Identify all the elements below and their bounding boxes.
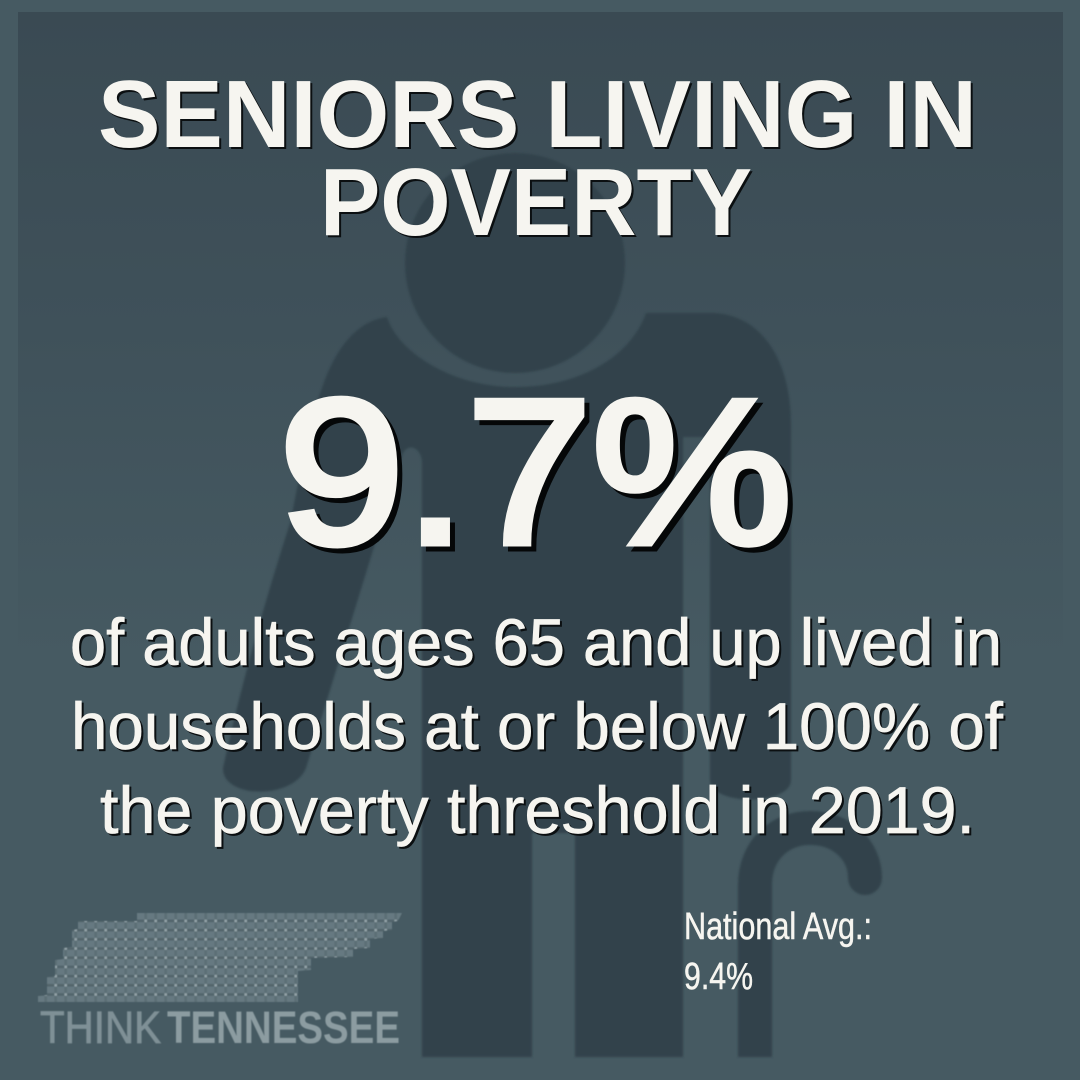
title line 1: SENIORS LIVING IN	[98, 61, 977, 168]
description line 3: the poverty threshold in 2019.	[100, 773, 975, 847]
national average value: 9.4%	[684, 956, 753, 998]
title	[98, 61, 977, 256]
figure head	[405, 153, 625, 373]
figure body and legs	[223, 313, 791, 1057]
description line 1: of adults ages 65 and up lived in	[70, 605, 1002, 679]
national average note	[684, 906, 872, 998]
icon: senior figure with cane	[223, 153, 882, 1057]
national average label: National Avg.:	[684, 906, 872, 948]
description line 2: households at or below 100% of	[71, 689, 1004, 763]
title line 2: POVERTY	[320, 149, 752, 256]
figure cane	[755, 828, 865, 1057]
logo: Think Tennessee	[38, 913, 402, 1053]
logo: Tennessee state dot map	[38, 913, 402, 1002]
logo wordmark: THINK	[40, 1002, 161, 1053]
description text	[70, 605, 1004, 847]
headline statistic: 9.7%	[279, 357, 792, 587]
logo wordmark	[40, 1002, 400, 1053]
logo wordmark: TENNESSEE	[167, 1002, 400, 1053]
